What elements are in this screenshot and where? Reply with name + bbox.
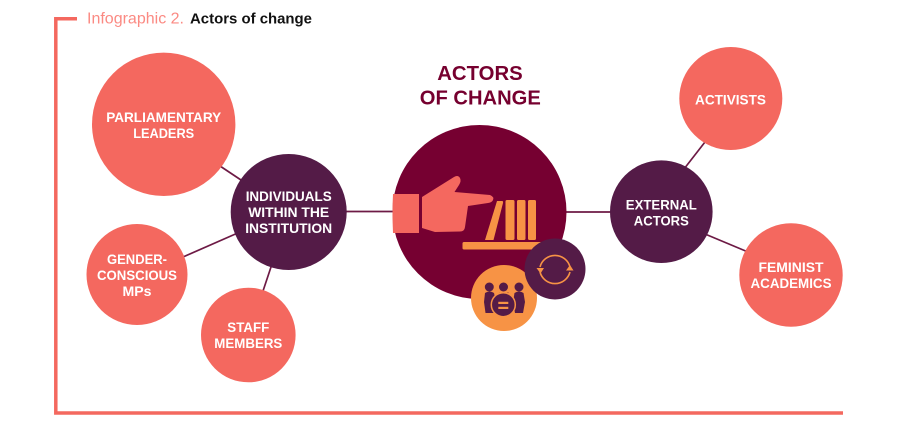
circle: activists: ACTIVISTS (695, 92, 766, 108)
circle: parliamentary leaders: PARLIAMENTARY (106, 109, 222, 125)
frame (56, 19, 843, 413)
circle: feminist academics (739, 223, 843, 327)
circle: feminist academics: FEMINIST (758, 259, 824, 275)
circle: gender-conscious MPs: GENDER- (107, 251, 167, 267)
circle: external actors: ACTORS (634, 212, 689, 228)
central circle (392, 125, 566, 299)
title (87, 10, 312, 28)
connector lines (183, 142, 748, 291)
circle: parliamentary leaders: LEADERS (133, 125, 194, 141)
circle: activists (679, 47, 782, 150)
title: Infographic 2. (87, 10, 184, 28)
circle: individuals within the institution (231, 154, 347, 270)
circle: gender-conscious MPs (86, 224, 188, 325)
central heading (420, 62, 541, 110)
circle: individuals within the institution: INDIVIDUALS (246, 188, 332, 204)
circle: external actors (610, 160, 713, 263)
icon: people with equals sign (471, 265, 537, 331)
icon: cycle in dark circle (524, 238, 586, 300)
circle: staff members: MEMBERS (214, 335, 282, 351)
central heading: ACTORS (437, 62, 523, 85)
circle: gender-conscious MPs: MPs (122, 283, 152, 299)
circle: external actors: EXTERNAL (626, 196, 697, 212)
circle: staff members: STAFF (227, 319, 270, 335)
circle: feminist academics: ACADEMICS (750, 275, 832, 291)
circle: individuals within the institution: INSTITUTION (245, 220, 332, 236)
central heading: OF CHANGE (420, 86, 541, 110)
circle: parliamentary leaders (92, 53, 235, 196)
circle: individuals within the institution: WITHIN THE (248, 204, 329, 220)
title: Actors of change (190, 10, 312, 28)
circle: staff members (201, 288, 296, 382)
icon: pointing hand (392, 176, 493, 233)
icon: falling books on shelf (462, 200, 542, 250)
circle: gender-conscious MPs: CONSCIOUS (97, 267, 177, 283)
